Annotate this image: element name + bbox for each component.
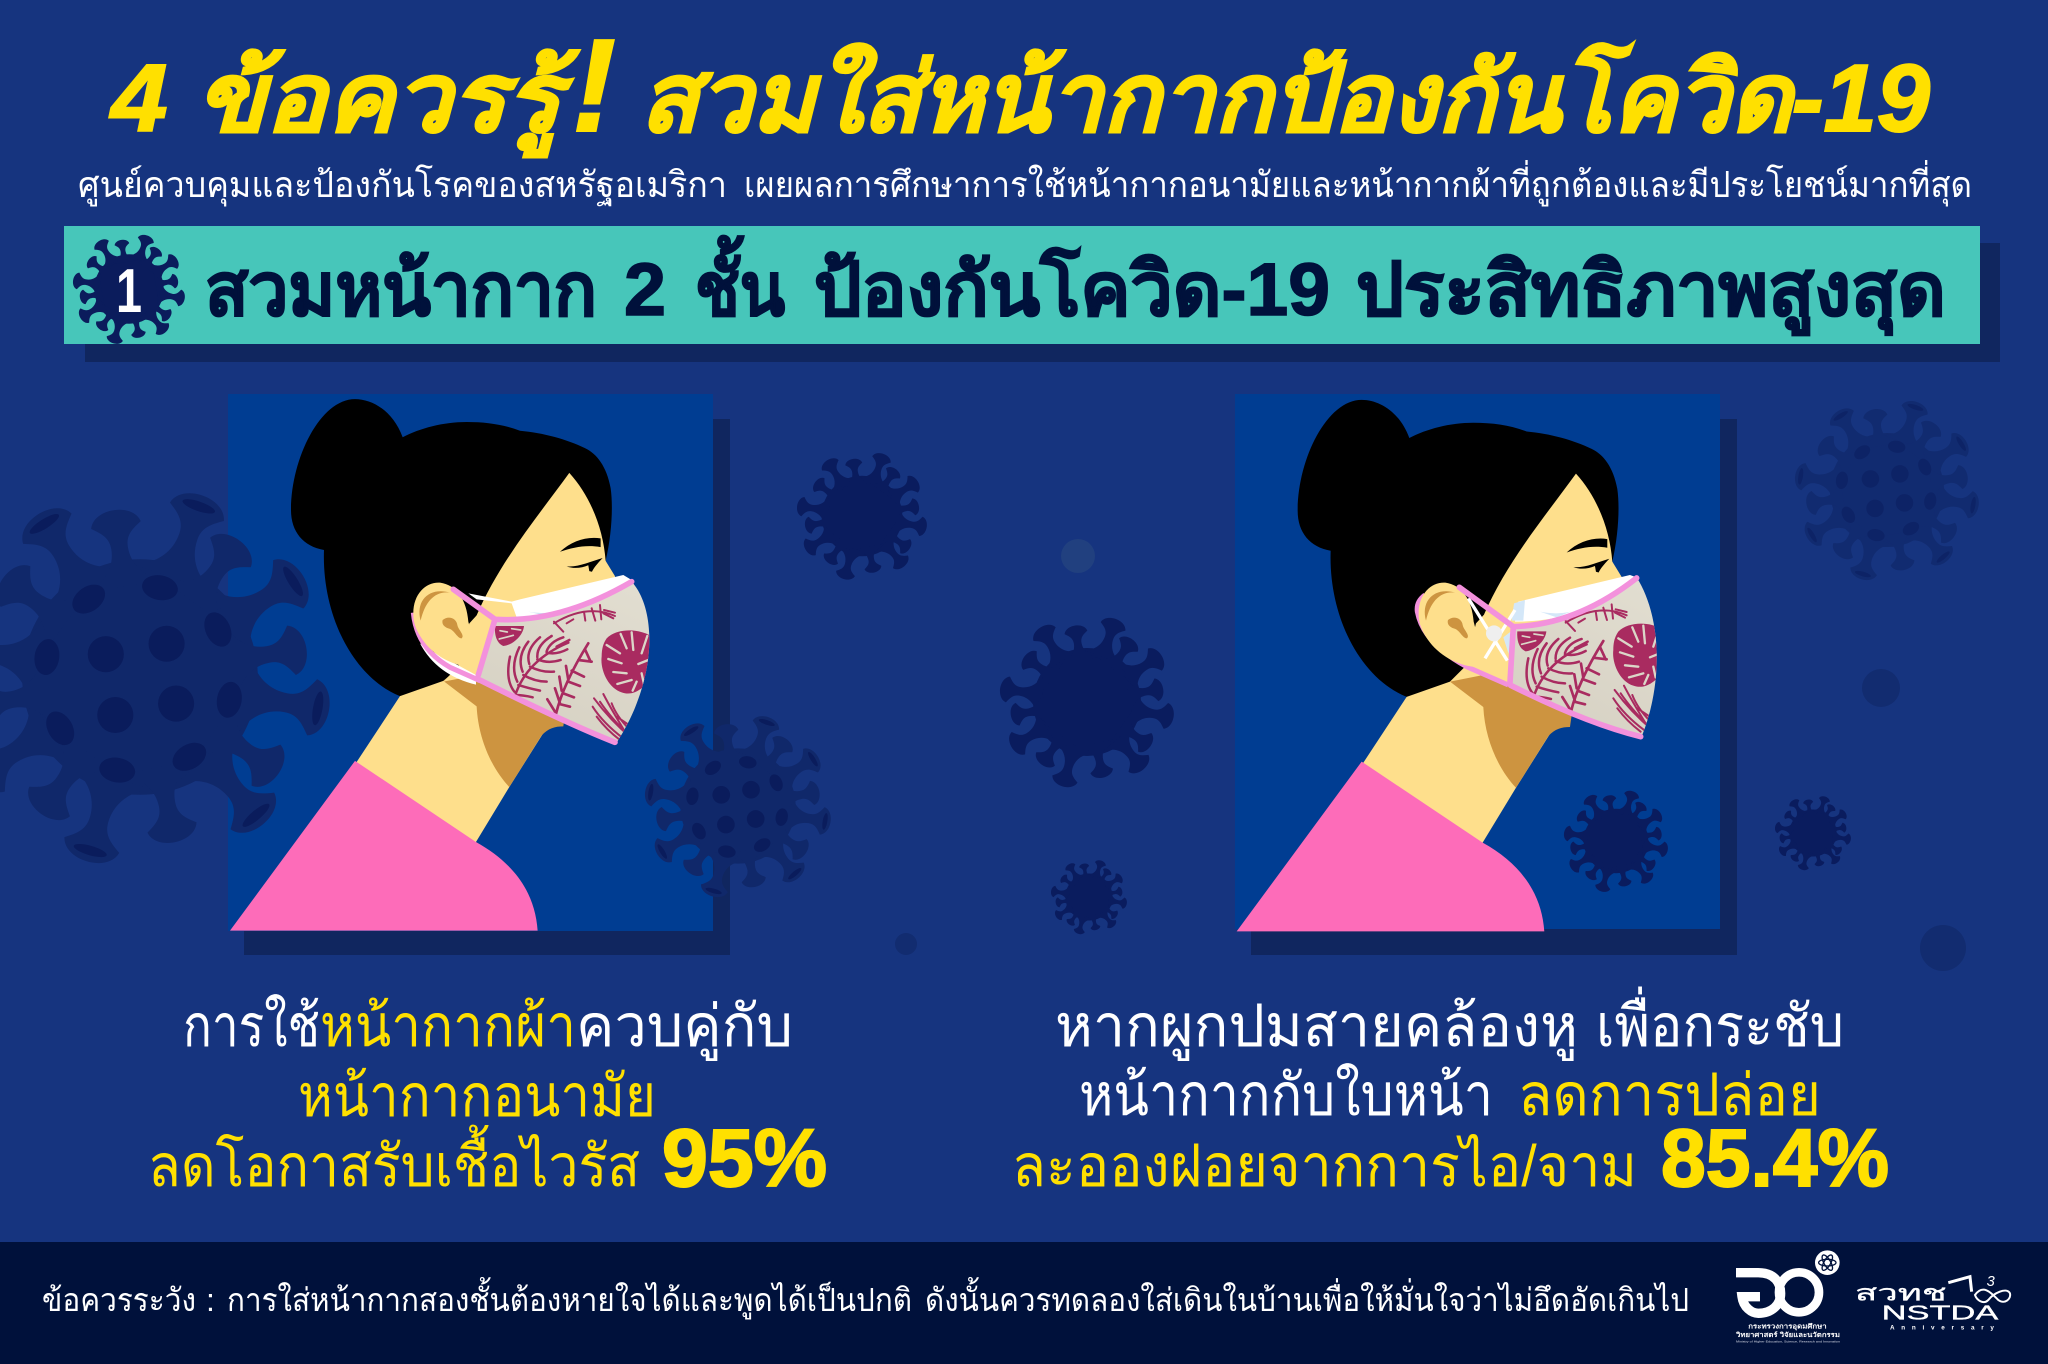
virus: large left background [0, 481, 337, 874]
heading text: ชั้น [695, 235, 785, 331]
shadow: left illustration panel [244, 419, 730, 955]
caption: right: หน้ากากกับใบหน้า [1079, 1062, 1493, 1128]
caption: left: หน้ากากอนามัย [298, 1064, 656, 1129]
heading text [205, 235, 1946, 336]
caption: right: หากผูกปมสายคล้องหู [1055, 994, 1578, 1061]
shadow: right illustration panel [1251, 419, 1737, 955]
heading text: 2 [624, 248, 666, 331]
heading text: สวมหน้ากาก [205, 248, 597, 331]
subtitle: ศูนย์ควบคุมและป้องกันโรคของสหรัฐอเมริกา [78, 164, 727, 207]
virus: flat centre [997, 612, 1177, 792]
panel: right illustration background [1235, 394, 1720, 929]
footer warning text [42, 1277, 1689, 1320]
logo: NSTDA 30th anniversary: สวทช [1855, 1281, 1947, 1306]
logo: ministry: Ministry of Higher Education, Science, Research and Innovation [1736, 1339, 1840, 1343]
caption: left: ควบคู่กับ [576, 994, 793, 1061]
title [109, 12, 1930, 159]
double mask with knotted loop, right [1417, 575, 1665, 737]
dot: background particle 1 [1061, 539, 1095, 573]
logo: NSTDA 30th anniversary: 3 [1987, 1274, 1996, 1290]
double mask, left [413, 575, 653, 743]
panel: left illustration background [228, 394, 713, 931]
footer warning text: ข้อควรระวัง [42, 1282, 196, 1318]
heading text: ประสิทธิภาพสูงสุด [1356, 248, 1946, 336]
caption: left: หน้ากากผ้า [320, 994, 576, 1059]
title: ! [572, 12, 616, 159]
virus: flat inside right panel [1562, 787, 1670, 895]
dot: background particle 4 [1920, 925, 1966, 971]
caption: right: ละอองฝอยจากการไอ/จาม [1012, 1133, 1637, 1199]
virus: top right [1792, 395, 1982, 585]
virus: medium centre-left [642, 710, 834, 902]
logo: NSTDA 30th anniversary: NSTDA [1882, 1302, 1999, 1324]
subtitle [78, 160, 1972, 207]
logo: NSTDA 30th anniversary [1855, 1274, 2010, 1331]
dot: background particle 3 [1862, 669, 1900, 707]
virus: flat small lower centre [1050, 858, 1128, 936]
title: สวมใส่หน้ากากป้องกันโควิด-19 [640, 42, 1930, 152]
virus: flat top centre [795, 449, 929, 583]
icon: virus badge with number 1 [71, 231, 187, 347]
caption: left: ลดโอกาสรับเชื้อไวรัส [148, 1125, 640, 1199]
crossed ear loop and knot [1468, 598, 1515, 661]
heading text: ป้องกันโควิด-19 [814, 246, 1330, 331]
caption: left: การใช้ [183, 993, 320, 1059]
icon: virus badge with number 1: 1 [116, 257, 142, 326]
caption: right: 85.4% [1661, 1113, 1889, 1204]
logo: ministry: วิทยาศาสตร์ วิจัยและนวัตกรรม [1736, 1331, 1840, 1339]
footer warning text: : [206, 1282, 215, 1318]
caption: right: ลดการปล่อย [1518, 1063, 1821, 1128]
title: 4 ข้อควรรู้ [109, 45, 580, 158]
heading band shadow [85, 243, 2000, 362]
logo: ministry: กระทรวงการอุดมศึกษา [1748, 1323, 1827, 1331]
heading band [64, 226, 1980, 344]
subtitle: เผยผลการศึกษาการใช้หน้ากากอนามัยและหน้ากากผ้าที่ถูกต้องและมีประโยชน์มากที่สุด [744, 160, 1972, 207]
caption: left: 95% [662, 1113, 827, 1204]
logo: ministry [1736, 1250, 1840, 1343]
caption: left [148, 993, 827, 1204]
footer bar [0, 1242, 2048, 1364]
footer warning text: การใส่หน้ากากสองชั้นต้องหายใจได้และพูดได้เป็นปกติ [227, 1277, 912, 1320]
virus: flat small right [1774, 794, 1852, 872]
footer warning text: ดังนั้นควรทดลองใส่เดินในบ้านเพื่อให้มั่นใจว่าไม่อึดอัดเกินไป [925, 1277, 1689, 1318]
illustration: woman with knotted ear loop [1237, 400, 1665, 931]
illustration: woman wearing two masks [230, 399, 653, 931]
logo: NSTDA 30th anniversary: Anniversary [1890, 1324, 1994, 1331]
caption: right [1012, 986, 1889, 1204]
dot: background particle 2 [895, 933, 917, 955]
caption: right: เพื่อกระชับ [1596, 986, 1844, 1059]
